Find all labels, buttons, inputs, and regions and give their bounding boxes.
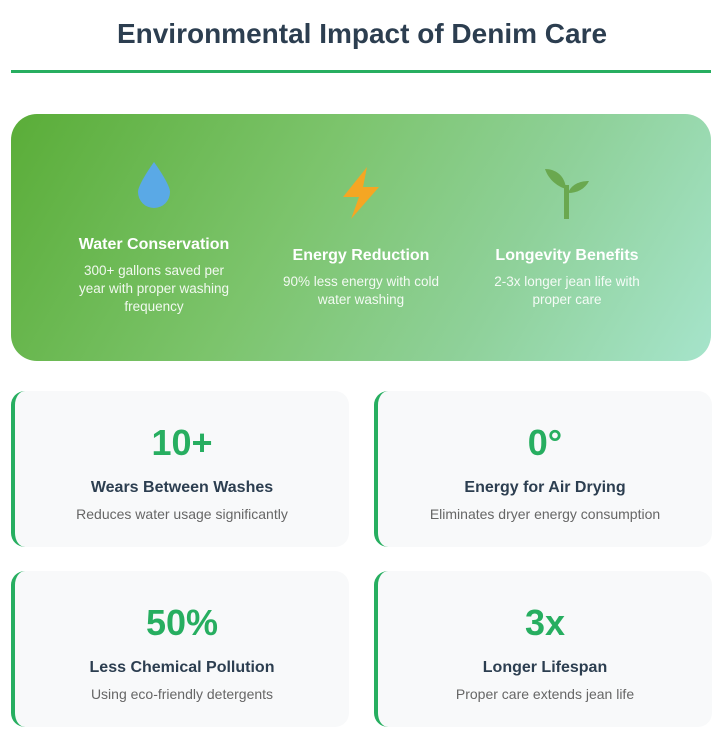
column: water conservation: frequency (124, 298, 184, 314)
card: energy for air drying: Energy for Air Drying (464, 479, 626, 496)
column: energy reduction: 90% less energy with cold (283, 274, 439, 288)
icon: lightning (343, 167, 379, 219)
card: longer lifespan (374, 571, 712, 727)
column: water conservation: year with proper washing (79, 280, 229, 296)
card: wears between washes: 10+ (151, 422, 213, 463)
column: energy reduction: Energy Reduction (293, 246, 429, 264)
column: longevity benefits (494, 169, 640, 307)
card: less chemical pollution (11, 571, 349, 727)
card: less chemical pollution: 50% (146, 602, 218, 643)
column: longevity benefits: proper care (532, 292, 602, 306)
column: water conservation (78, 162, 229, 314)
icon: water drop (138, 162, 170, 208)
title: Environmental Impact of Denim Care (117, 18, 607, 49)
card: energy for air drying: 0° (528, 422, 562, 463)
card: energy for air drying: Eliminates dryer energy consumption (430, 506, 660, 522)
column: water conservation: 300+ gallons saved per (84, 262, 224, 278)
card: wears between washes (11, 391, 349, 547)
column: longevity benefits: Longevity Benefits (495, 246, 639, 264)
card: longer lifespan: Longer Lifespan (483, 659, 607, 676)
card: less chemical pollution: Less Chemical Pollution (90, 659, 274, 676)
column: longevity benefits: 2-3x longer jean life with (494, 274, 640, 288)
panel: impact summary (11, 114, 711, 361)
card: wears between washes: Wears Between Washes (91, 479, 273, 496)
card: wears between washes: Reduces water usage significantly (76, 506, 288, 522)
card: energy for air drying (374, 391, 712, 547)
column: water conservation: Water Conservation (79, 236, 229, 252)
icon: sprout (545, 169, 589, 219)
column: energy reduction (283, 167, 439, 307)
card: less chemical pollution: Using eco-friendly detergents (91, 686, 273, 702)
column: energy reduction: water washing (318, 292, 404, 306)
card: longer lifespan: Proper care extends jean life (456, 686, 634, 702)
card: longer lifespan: 3x (525, 602, 565, 643)
